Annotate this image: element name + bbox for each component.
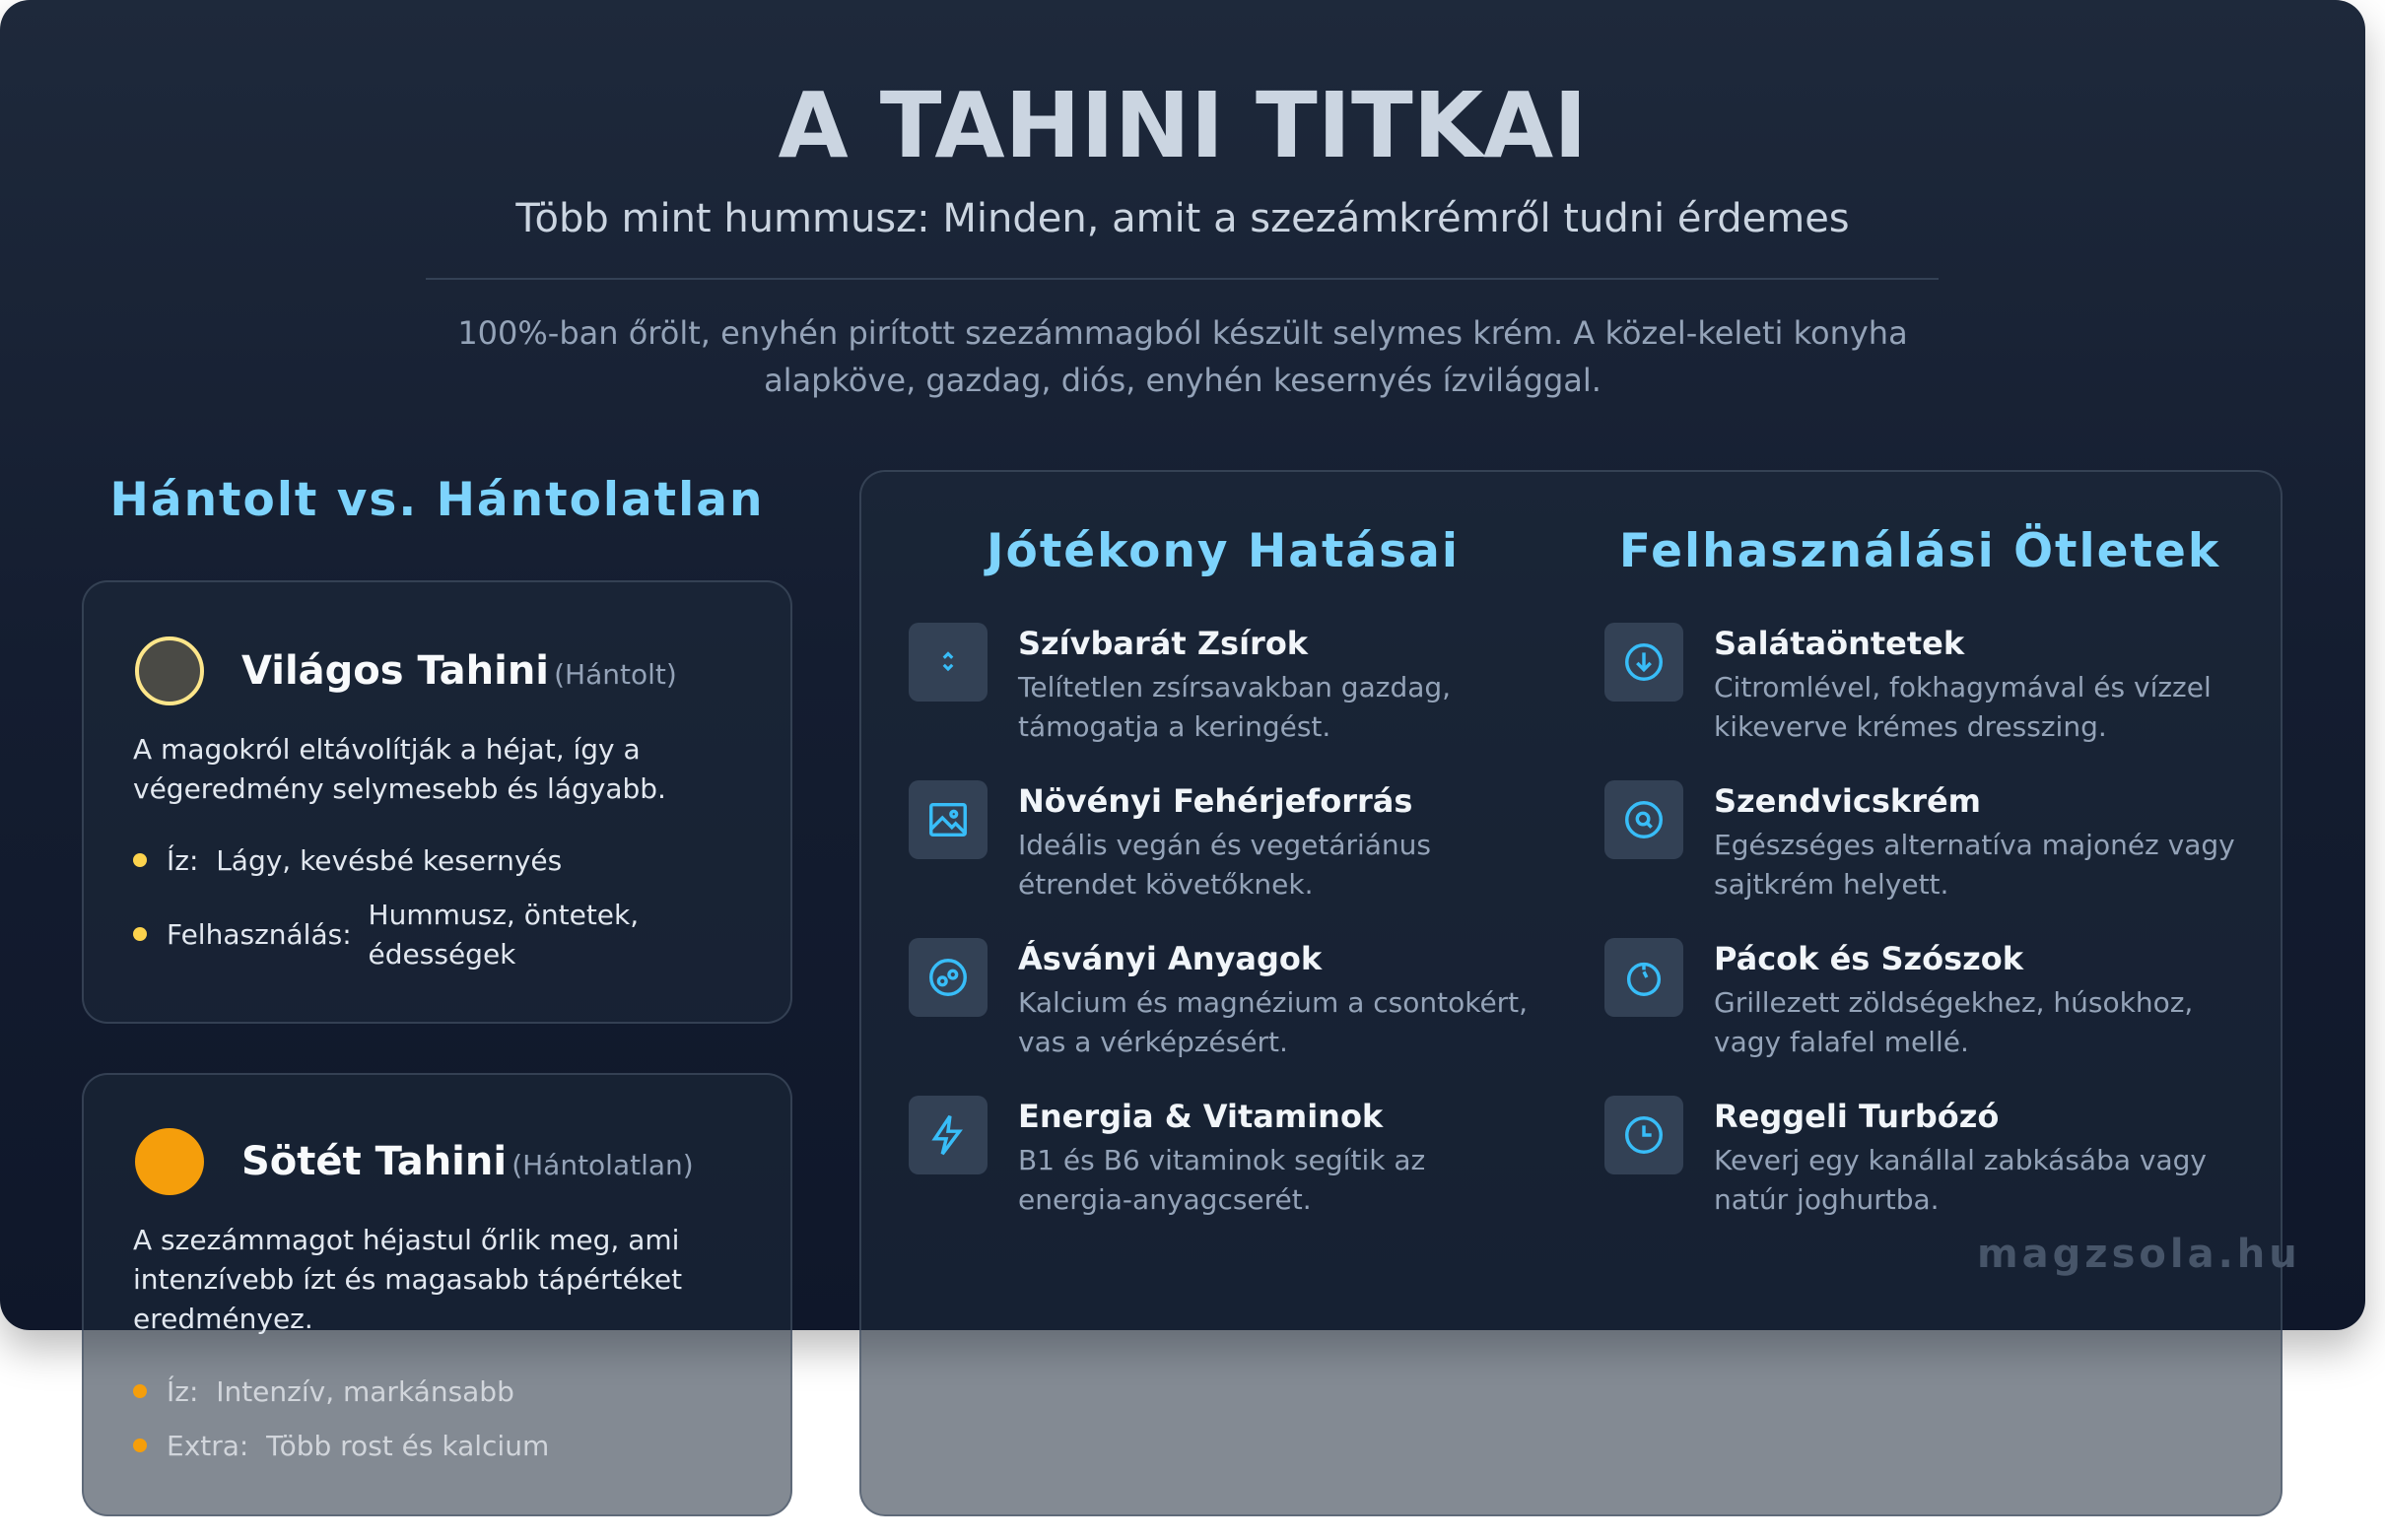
item: heart fats: támogatja a keringést. <box>1018 710 1330 743</box>
watermark: magzsola.hu <box>1977 1232 2301 1277</box>
item: minerals: Ásványi Anyagok <box>1018 940 1322 977</box>
description: A szezámmagot héjastul őrlik meg, ami <box>133 1224 679 1256</box>
item: sandwich spread: Egészséges alternatíva majonéz vagy <box>1714 829 2235 861</box>
item: heart fats <box>909 623 1451 743</box>
item: dressings: Salátaöntetek <box>1714 625 1964 662</box>
icon: clock <box>1604 1096 1683 1174</box>
title: A TAHINI TITKAI <box>779 73 1587 178</box>
item: protein: Növényi Fehérjeforrás <box>1018 782 1412 820</box>
description: végeredmény selymesebb és lágyabb. <box>133 772 666 805</box>
item: energy: Energia & Vitaminok <box>1018 1098 1383 1135</box>
bullet: usage: Felhasználás: <box>167 918 352 951</box>
item: protein: étrendet követőknek. <box>1018 868 1314 901</box>
panel: dark tahini <box>82 1073 792 1516</box>
item: marinades: Pácok és Szószok <box>1714 940 2023 977</box>
panel: light tahini <box>82 580 792 1024</box>
item: marinades <box>1604 938 2193 1058</box>
item: marinades: Grillezett zöldségekhez, húsokhoz, <box>1714 986 2193 1019</box>
icon: image <box>909 780 988 859</box>
item: protein <box>909 780 1431 901</box>
item: sandwich spread: sajtkrém helyett. <box>1714 868 1948 901</box>
panel: benefits and uses <box>859 470 2283 1516</box>
subtitle: Több mint hummusz: Minden, amit a szezámkrémről tudni érdemes <box>515 196 1850 241</box>
intro text <box>457 314 1908 399</box>
item: breakfast: natúr joghurtba. <box>1714 1183 1940 1216</box>
description: intenzívebb ízt és magasabb tápértéket <box>133 1263 682 1296</box>
heading: benefits: Jótékony Hatásai <box>987 524 1460 578</box>
item: dressings: Citromlével, fokhagymával és vízzel <box>1714 671 2212 703</box>
item: heart fats: Telítetlen zsírsavakban gazdag, <box>1018 671 1451 703</box>
description <box>133 1224 682 1335</box>
item: energy: energia-anyagcserét. <box>1018 1183 1312 1216</box>
description <box>133 733 666 805</box>
item: breakfast: Keverj egy kanállal zabkásába vagy <box>1714 1144 2207 1176</box>
description: A magokról eltávolítják a héjat, így a <box>133 733 641 766</box>
card title: Sötét Tahini (Hántolatlan) <box>241 1139 694 1184</box>
icon: chevrons <box>909 623 988 702</box>
bullet: usage: édességek <box>369 938 515 971</box>
item: heart fats: Szívbarát Zsírok <box>1018 625 1308 662</box>
heading: Hántolt vs. Hántolatlan: Hántolt vs. Hántolatlan <box>110 473 764 527</box>
item: sandwich spread <box>1604 780 2235 901</box>
icon: light circle <box>135 636 204 705</box>
icon: timer <box>1604 938 1683 1017</box>
intro text: alapköve, gazdag, diós, enyhén kesernyés ízvilággal. <box>764 362 1601 399</box>
bullet: extra: Extra: Több rost és kalcium <box>167 1430 549 1462</box>
item: sandwich spread: Szendvicskrém <box>1714 782 1981 820</box>
item: minerals: Kalcium és magnézium a csontokért, <box>1018 986 1528 1019</box>
item: protein: Ideális vegán és vegetáriánus <box>1018 829 1431 861</box>
icon: pills <box>909 938 988 1017</box>
heading: uses: Felhasználási Ötletek <box>1619 524 2220 578</box>
item: minerals: vas a vérképzésért. <box>1018 1026 1288 1058</box>
item: energy: B1 és B6 vitaminok segítik az <box>1018 1144 1425 1176</box>
item: breakfast <box>1604 1096 2207 1216</box>
item: marinades: vagy falafel mellé. <box>1714 1026 1969 1058</box>
item: energy <box>909 1096 1425 1216</box>
bullet: taste: Íz: Lágy, kevésbé kesernyés <box>167 844 562 877</box>
intro text: 100%-ban őrölt, enyhén pirított szezámmagból készült selymes krém. A közel-keleti konyha <box>457 314 1908 352</box>
icon: arrow down circle <box>1604 623 1683 702</box>
item: breakfast: Reggeli Turbózó <box>1714 1098 1999 1135</box>
bullet: taste: Íz: Intenzív, markánsabb <box>167 1375 514 1408</box>
description: eredményez. <box>133 1303 313 1335</box>
bullet: usage <box>133 899 639 971</box>
icon: search circle <box>1604 780 1683 859</box>
bullet: usage: Hummusz, öntetek, <box>369 899 639 931</box>
icon: lightning <box>909 1096 988 1174</box>
item: minerals <box>909 938 1528 1058</box>
item: dressings <box>1604 623 2212 743</box>
icon: orange circle <box>135 1128 204 1195</box>
card title: Világos Tahini (Hántolt) <box>241 648 677 694</box>
item: dressings: kikeverve krémes dresszing. <box>1714 710 2107 743</box>
